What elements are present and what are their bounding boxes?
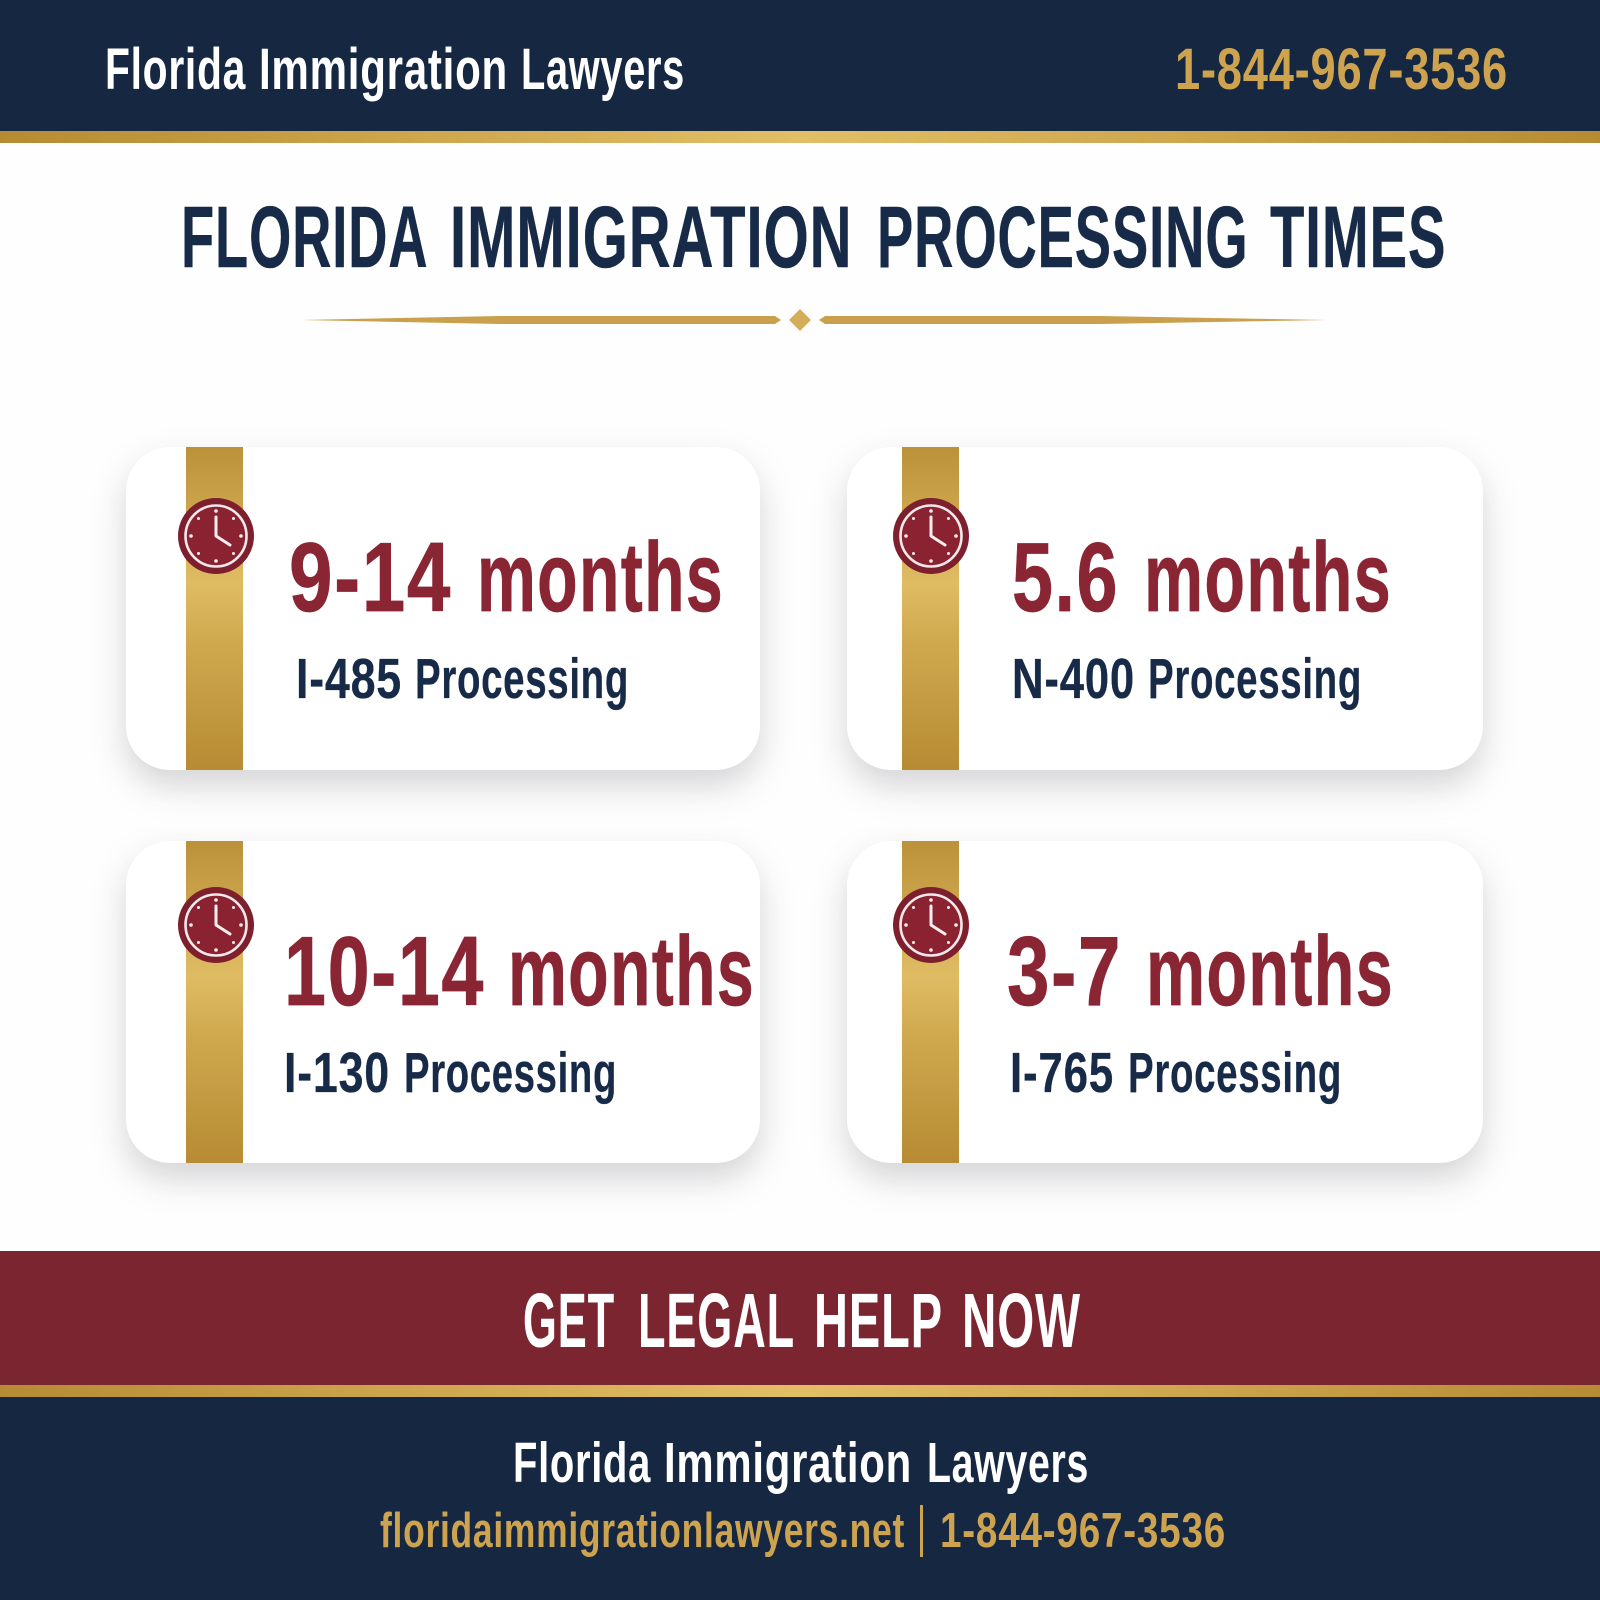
call to action text: NOW (962, 1278, 1081, 1364)
footer (0, 1385, 1600, 1600)
icon: clock (893, 887, 969, 963)
title divider with diamond (301, 309, 1327, 331)
footer firm name (513, 1431, 1089, 1495)
duration: months (477, 522, 724, 632)
panel: N-400 processing (847, 447, 1483, 770)
footer separator (920, 1505, 923, 1557)
panel: I-130 processing (126, 841, 760, 1163)
duration (289, 522, 724, 632)
form label: I-485 (296, 647, 402, 711)
duration (284, 916, 755, 1026)
header firm name: Lawyers (521, 37, 685, 102)
icon: clock (178, 887, 254, 963)
duration: 3-7 (1007, 916, 1122, 1026)
duration (1012, 522, 1392, 632)
header firm name (105, 37, 685, 102)
title: FLORIDA (181, 189, 428, 286)
title: TIMES (1270, 189, 1446, 286)
header firm name: Immigration (259, 37, 508, 102)
form label (296, 647, 629, 711)
call to action text: HELP (814, 1278, 943, 1364)
title (181, 189, 1446, 286)
form label: Processing (1128, 1041, 1342, 1105)
duration: 5.6 (1012, 522, 1119, 632)
duration (1007, 916, 1394, 1026)
call to action text: LEGAL (638, 1278, 795, 1364)
duration: months (1146, 916, 1394, 1026)
icon: clock (178, 498, 254, 574)
form label: Processing (404, 1041, 617, 1105)
form label: N-400 (1012, 647, 1135, 711)
form label (284, 1041, 617, 1105)
panel: I-765 processing (847, 841, 1483, 1163)
title: IMMIGRATION (450, 189, 852, 286)
duration: 9-14 (289, 522, 452, 632)
panel: I-485 processing (126, 447, 760, 770)
duration: months (508, 916, 755, 1026)
call to action band (0, 1251, 1600, 1385)
footer website: floridaimmigrationlawyers.net (380, 1504, 905, 1558)
form label: Processing (1148, 647, 1362, 711)
header phone number: 1-844-967-3536 (1175, 37, 1508, 102)
call to action text (523, 1278, 1081, 1364)
form label: Processing (415, 647, 629, 711)
footer firm name: Lawyers (927, 1431, 1089, 1495)
call to action text: GET (523, 1278, 615, 1364)
footer phone number: 1-844-967-3536 (940, 1504, 1226, 1558)
form label: I-130 (284, 1041, 390, 1105)
icon: clock (893, 498, 969, 574)
duration: months (1144, 522, 1392, 632)
header firm name: Florida (105, 37, 246, 102)
footer firm name: Florida (513, 1431, 651, 1495)
title: PROCESSING (877, 189, 1248, 286)
duration: 10-14 (284, 916, 485, 1026)
form label: I-765 (1010, 1041, 1114, 1105)
footer firm name: Immigration (664, 1431, 912, 1495)
form label (1010, 1041, 1342, 1105)
header bar (0, 0, 1600, 143)
form label (1012, 647, 1362, 711)
